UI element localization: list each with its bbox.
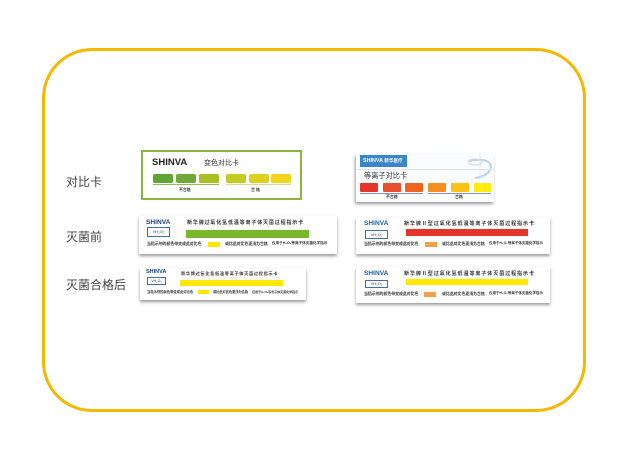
label: before sterilization: 灭菌前 [66, 230, 102, 244]
yellow indicator bar [180, 280, 283, 286]
card title: 新华牌过氧化氢低温等离子体灭菌过程指示卡 [187, 220, 304, 226]
label: comparison card: 对比卡 [66, 175, 102, 189]
logo: SHINVA [364, 220, 388, 227]
yellow indicator bar [406, 279, 528, 285]
card title: 新华牌Ⅱ型过氧化氢低温等离子体灭菌过程指示卡 [404, 270, 535, 276]
yellow reference swatch [198, 290, 209, 294]
card: green colour comparison [141, 150, 302, 200]
caption: not qualified: 不合格 [386, 194, 398, 199]
card title: 新华牌过氧化氢低温等离子体灭菌过程指示卡 [181, 271, 278, 276]
card: plasma comparison [356, 154, 494, 202]
logo: SHINVA [152, 156, 187, 168]
chemical label box: VH₂O₂ [371, 232, 382, 237]
caption: qualified: 合 格 [251, 186, 260, 192]
label: after qualified sterilization: 灭菌合格后 [66, 278, 126, 292]
red indicator bar [406, 229, 528, 236]
note text left: 当指示剂的颜色带变成此对比色 [147, 290, 193, 294]
card title: 等离子对比卡 [364, 171, 407, 180]
blue logo header [360, 155, 407, 167]
chemical label box: VH₂O₂ [153, 229, 164, 234]
rounded yellow frame [42, 48, 586, 412]
swatches [153, 174, 291, 185]
note text middle: 或比此对比色更浅为合格 [442, 241, 485, 246]
indicator card: after, yellow bar large [356, 267, 550, 303]
yellow reference swatch [208, 242, 220, 247]
divider [356, 169, 494, 170]
chemical label box [365, 230, 388, 239]
chemical label box [147, 277, 166, 285]
card title: 变色对比卡 [204, 160, 239, 167]
note text right: 仅用于H₂O₂等离子体灭菌化学指示 [272, 241, 327, 245]
orange reference swatch [424, 292, 436, 297]
swatches [360, 183, 491, 194]
note text middle: 或比此对比色更浅为合格 [442, 291, 485, 296]
note text right: 仅用于H₂O₂等离子体灭菌化学指示 [489, 291, 543, 295]
logo: SHINVA [364, 270, 388, 277]
note text right: 仅用于H₂O₂等离子体灭菌化学指示 [489, 241, 543, 245]
logo: SHINVA [146, 269, 166, 275]
indicator card: after, yellow bar small [140, 268, 306, 300]
orange reference swatch [425, 242, 437, 247]
card title: 新华牌Ⅱ型过氧化氢低温等离子体灭菌过程指示卡 [404, 220, 535, 226]
chemical label box: VH₂O₂ [371, 281, 382, 286]
caption: not qualified: 不合格 [179, 186, 191, 192]
note text left: 当指示剂的颜色带变成此对比色 [364, 241, 418, 246]
green indicator bar [186, 230, 309, 238]
watermark emblem [468, 154, 492, 180]
note text left: 当指示剂的颜色带变成此对比色 [364, 291, 418, 296]
indicator card: before, green bar [139, 216, 337, 254]
blue logo header: SHINVA 新华医疗 [363, 158, 403, 164]
logo: SHINVA [146, 218, 170, 226]
chemical label box [147, 227, 170, 237]
indicator card: before, red bar [356, 217, 550, 254]
note text left: 当指示剂的颜色带变成此对比色 [147, 241, 201, 246]
chemical label box: VH₂O₂ [151, 279, 162, 283]
chemical label box [365, 280, 388, 288]
note text middle: 或比此对比色更浅为合格 [225, 241, 268, 246]
caption: qualified: 合格 [455, 194, 463, 199]
note text middle: 或比此对比色更浅为合格 [213, 290, 248, 294]
note text right: 仅用于H₂O₂等离子体灭菌化学指示 [252, 290, 298, 294]
